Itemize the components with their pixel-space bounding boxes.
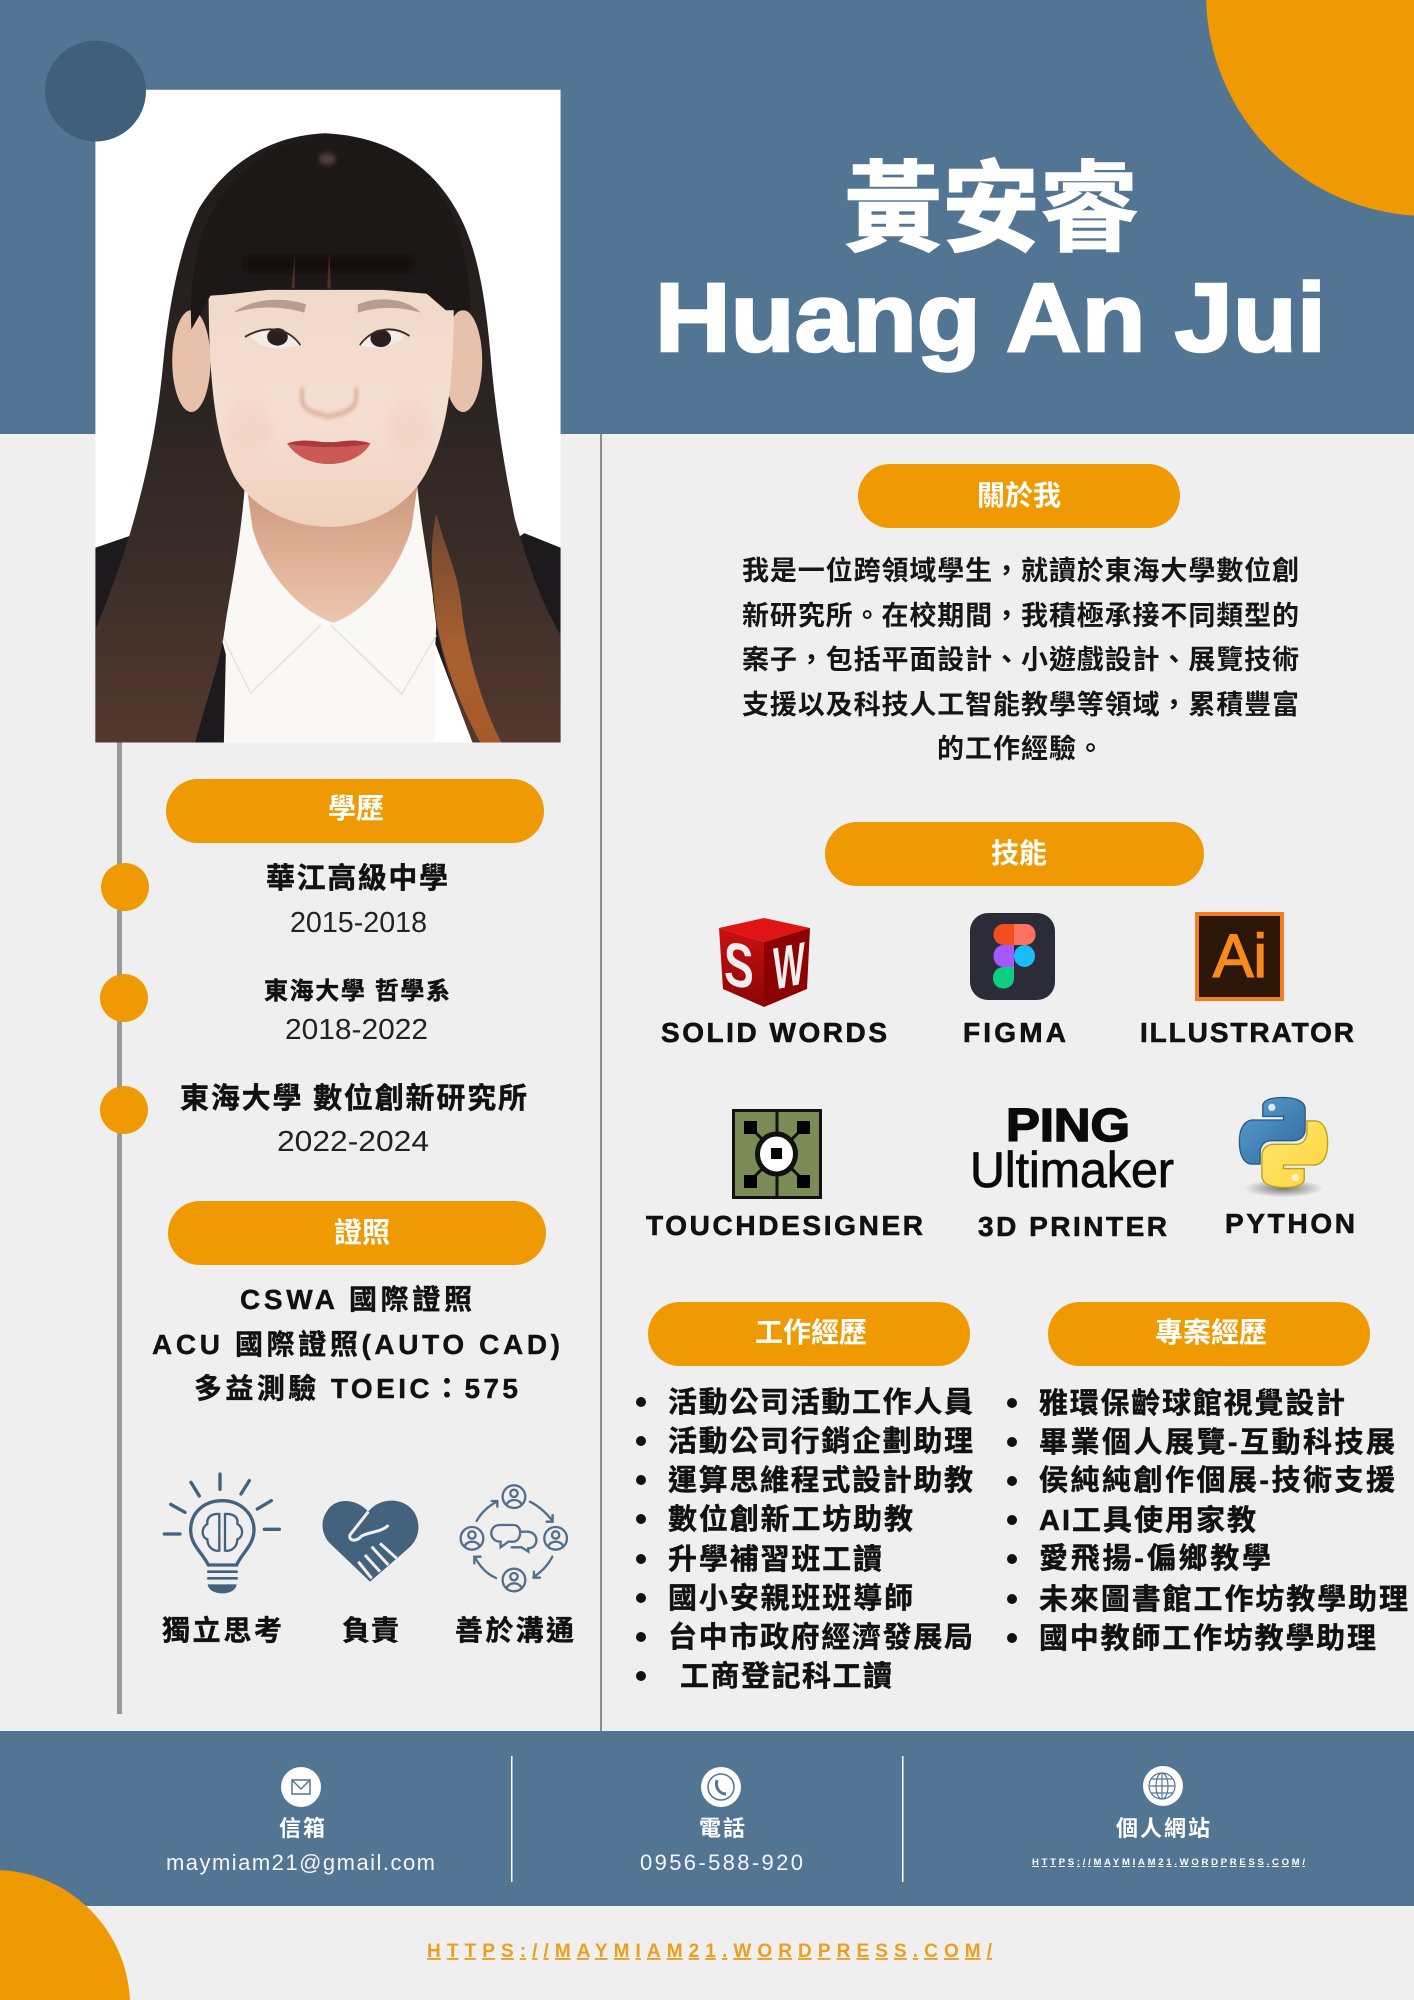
decorative orange circle bottom left [0,1870,130,2000]
header band [0,0,1414,434]
heading pill: skills [825,822,1204,886]
about text block: 案子，包括平面設計、小遊戲設計、展覽技術 [742,645,1299,675]
years 3: 2022-2024 [277,1126,429,1158]
icon: touchdesigner [734,1110,820,1198]
panel: certificates [152,1201,560,1404]
heading pill: work [648,1302,970,1366]
panel: work experience [636,1302,973,1693]
icon: light bulb with brain [164,1474,279,1593]
work list: 國小安親班班導師 [668,1582,913,1615]
school 1: 華江高級中學 [266,862,448,895]
photo portrait [95,90,561,743]
email address: maymiam21@gmail.com [166,1850,435,1875]
project list: AI工具使用家教 [1039,1504,1256,1537]
panel: soft skills [162,1474,574,1646]
english name: Huang An Jui [655,263,1326,372]
heading text: education: 學歷 [328,793,384,824]
timeline dot 1 [101,863,149,911]
panel: about [742,464,1299,764]
skill label: independent thinking: 獨立思考 [162,1615,282,1646]
project list: 侯純純創作個展-技術支援 [1039,1464,1395,1497]
icon: ping ultimaker logo: PING [1006,1099,1130,1151]
about text block: 新研究所。在校期間，我積極承接不同類型的 [742,601,1299,631]
heading pill: projects [1048,1302,1370,1366]
timeline line [117,740,122,1714]
icon: ping ultimaker logo: Ultimaker [970,1142,1174,1198]
project list: 國中教師工作坊教學助理 [1039,1622,1376,1655]
decorative dark circle [45,40,146,142]
title name [655,153,1326,372]
icon: phone [701,1767,741,1807]
bangs [190,263,470,330]
chinese name: 黃安睿 [844,153,1138,264]
panel: education [100,779,544,1158]
heading pill: about [858,464,1180,528]
work list [636,1386,973,1693]
panel: skills [646,822,1355,1242]
label: illustrator: ILLUSTRATOR [1140,1017,1354,1048]
timeline dot 3 [100,1086,148,1134]
work list: 活動公司活動工作人員 [668,1386,973,1419]
face [209,286,454,527]
about text block [742,555,1299,764]
phone number: 0956-588-920 [640,1850,803,1875]
decorative orange circle top right [1206,0,1414,216]
label: website: 個人網站 [1116,1816,1210,1841]
icon: illustrator: Ai [1213,922,1267,990]
icon: ping ultimaker logo [970,1099,1174,1198]
project list: 畢業個人展覽-互動科技展 [1039,1426,1395,1459]
work list: 台中市政府經濟發展局 [668,1620,973,1654]
website url small: HTTPS://MAYMIAM21.WORDPRESS.COM/ [1032,1857,1305,1868]
years 2: 2018-2022 [285,1014,428,1046]
skill label: responsible: 負責 [342,1615,399,1646]
label: email: 信箱 [279,1816,325,1841]
skill label: communication: 善於溝通 [455,1615,574,1646]
hair back [95,133,561,743]
work list: 工商登記科工讀 [680,1660,892,1693]
work list: 活動公司行銷企劃助理 [668,1425,973,1458]
heading text: about: 關於我 [977,480,1061,511]
about text block: 支援以及科技人工智能教學等領域，累積豐富 [742,689,1299,720]
about text block: 我是一位跨領域學生，就讀於東海大學數位創 [742,555,1299,586]
label: python: PYTHON [1225,1208,1355,1239]
icon: communication circle [461,1485,567,1591]
heading text: work: 工作經歷 [755,1317,867,1348]
label: phone: 電話 [699,1816,745,1841]
about text block: 的工作經驗。 [937,733,1104,764]
project list: 雅環保齡球館視覺設計 [1039,1387,1345,1420]
heading pill: education [166,779,544,843]
heading text: skills: 技能 [991,838,1047,869]
project list: 未來圖書館工作坊教學助理 [1039,1583,1408,1616]
school 2: 東海大學 哲學系 [264,978,450,1005]
website url large: HTTPS://MAYMIAM21.WORDPRESS.COM/ [427,1941,993,1962]
heading text: projects: 專案經歷 [1155,1317,1267,1348]
icon: figma [970,913,1055,1000]
icon: solidworks: S [724,928,754,1003]
school 3: 東海大學 數位創新研究所 [180,1082,527,1115]
icon: heart handshake [323,1501,418,1582]
label: touchdesigner: TOUCHDESIGNER [646,1210,923,1241]
work list: 數位創新工坊助教 [668,1503,913,1536]
icon: website [1143,1766,1183,1806]
icon: solidworks [719,918,810,1007]
project list: 愛飛揚-偏鄉教學 [1039,1542,1271,1575]
work list: 升學補習班工讀 [668,1543,882,1576]
footer contact band [0,1731,1414,1906]
label: figma: FIGMA [963,1017,1066,1048]
icon: solidworks: W [773,930,805,1004]
icon: illustrator [1197,914,1282,999]
label: solid works: SOLID WORDS [661,1017,887,1048]
project list [1007,1387,1408,1655]
icon: python [1239,1098,1328,1197]
certificate 2: ACU 國際證照(AUTO CAD) [152,1329,560,1360]
panel: project experience [1007,1302,1408,1655]
years 1: 2015-2018 [290,907,427,939]
label: 3d printer: 3D PRINTER [978,1211,1167,1242]
work list: 運算思維程式設計助教 [668,1464,973,1497]
heading text: certificates: 證照 [334,1217,390,1248]
certificate 3: 多益測驗 TOEIC：575 [194,1372,518,1404]
right column divider [600,434,602,1731]
heading pill: certificates [168,1201,546,1265]
timeline dot 2 [100,974,148,1022]
certificate 1: CSWA 國際證照 [240,1284,472,1315]
icon: email [281,1767,321,1807]
